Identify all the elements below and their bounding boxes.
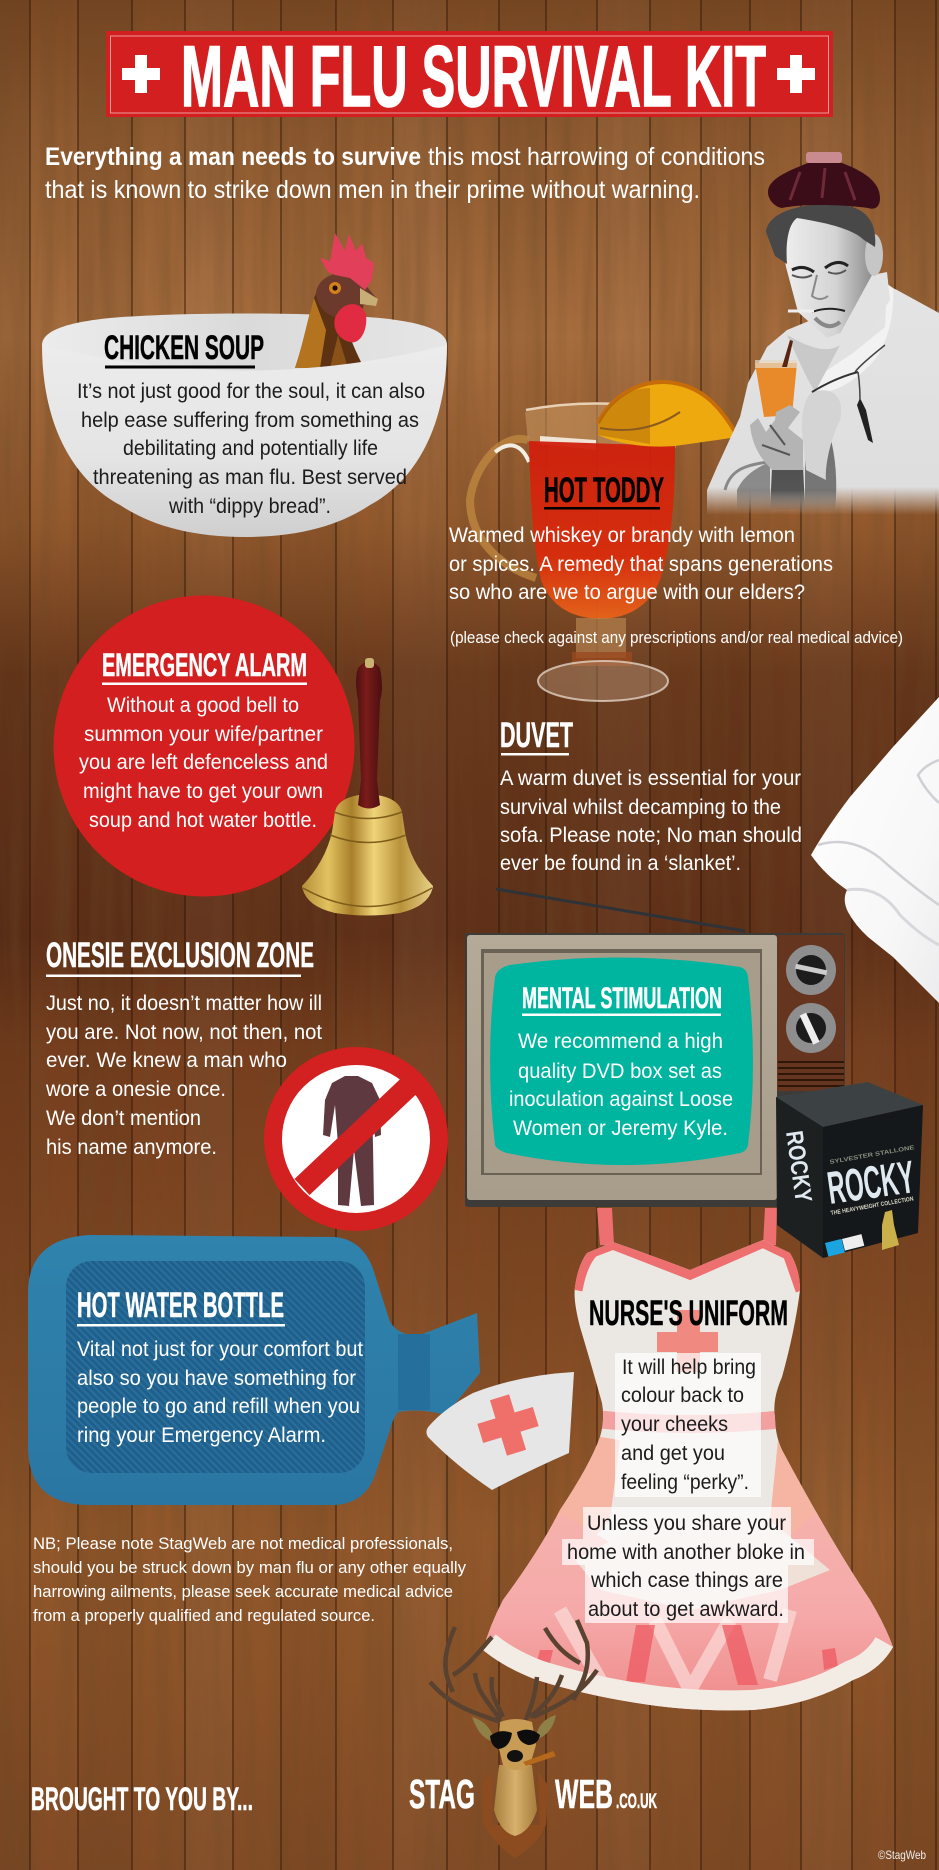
panel: chicken soup [42, 233, 447, 537]
body text: duvet: ever be found in a ‘slanket’. [500, 852, 741, 875]
disclaimer note: from a properly qualified and regulated source. [33, 1606, 375, 1625]
body text: hot water bottle: Vital not just for your comfort but [77, 1338, 363, 1361]
bowl inner [42, 314, 447, 372]
disclaimer note: NB; Please note StagWeb are not medical professionals, [33, 1534, 453, 1553]
ice bag [768, 163, 880, 209]
nose [507, 1750, 523, 1762]
cigarette [788, 310, 814, 312]
disclaimer note: should you be struck down by man flu or any other equally [33, 1558, 466, 1577]
heading: onesie exclusion zone: ONESIE EXCLUSION ZONE [46, 936, 314, 975]
disclaimer note: harrowing ailments, please seek accurate medical advice [33, 1582, 453, 1601]
knob: lower [786, 1003, 836, 1053]
neckline trim [575, 1240, 803, 1290]
body text: onesie: his name anymore. [46, 1136, 217, 1159]
logo text: web.co.uk: WEB [555, 1771, 613, 1817]
icon: DVD box set: ROCKY [780, 1129, 817, 1204]
body text: duvet: sofa. Please note; No man should [500, 824, 802, 847]
glass handle [470, 439, 536, 578]
body text: nurse's uniform upper: feeling “perky”. [621, 1471, 749, 1494]
head [780, 210, 872, 338]
body text: emergency alarm: Without a good bell to [107, 694, 299, 717]
hand [750, 405, 803, 470]
body text: duvet [500, 767, 802, 875]
forearm [770, 465, 805, 510]
straps [597, 1208, 777, 1245]
facial features [792, 262, 848, 272]
body text: onesie: Just no, it doesn’t matter how ill [46, 992, 322, 1015]
icon: left plus [122, 55, 160, 93]
body text: mental stimulation: Women or Jeremy Kyle. [513, 1117, 728, 1140]
title banner [106, 29, 833, 125]
heading: nurse's uniform: NURSE'S UNIFORM [589, 1294, 788, 1333]
blanket shading [737, 462, 770, 512]
body text: hot toddy [449, 524, 833, 604]
drink [529, 441, 675, 619]
icon: nurse hat [426, 1372, 574, 1490]
heading: mental stimulation: MENTAL STIMULATION [522, 982, 722, 1015]
logo text: stag: STAG [409, 1771, 475, 1817]
footer: brought to you by: BROUGHT TO YOU BY... [31, 1781, 253, 1817]
body text: mental stimulation [509, 1030, 733, 1140]
head [498, 1719, 536, 1770]
logo text: web.co.uk: .CO.UK [616, 1790, 657, 1813]
hem [483, 1647, 893, 1710]
icon: hot toddy glass [470, 382, 738, 701]
body text: nurse's uniform upper: It will help bring [622, 1356, 756, 1379]
body text: mental stimulation: inoculation against Loose [509, 1088, 733, 1111]
skirt highlights [560, 1610, 790, 1690]
icon: stag head logo [430, 1620, 597, 1858]
belt [602, 1410, 776, 1433]
teal screen [490, 957, 753, 1165]
body text: mental stimulation: We recommend a high [518, 1030, 723, 1053]
antlers [430, 1620, 597, 1722]
icon: DVD box set [776, 1082, 923, 1258]
icon: duvet [811, 697, 939, 1003]
body text: emergency alarm [79, 694, 328, 832]
bottle silhouette [28, 1235, 480, 1505]
glass rim area [525, 404, 680, 448]
blanket [707, 285, 939, 520]
arm sleeve [802, 390, 841, 480]
body text: duvet: survival whilst decamping to the [500, 796, 781, 819]
icon: hand bell [302, 658, 433, 916]
pleats [535, 1625, 838, 1685]
panel: nurse's uniform text [562, 1294, 814, 1623]
body text: nurse's uniform upper: your cheeks [621, 1413, 728, 1436]
body text: emergency alarm: summon your wife/partner [84, 723, 323, 746]
icon: no onesie sign [273, 1056, 439, 1222]
body text: nurse's uniform lower: home with another bloke in [567, 1541, 805, 1564]
body text: nurse's uniform upper [621, 1356, 756, 1494]
apron [575, 1520, 830, 1610]
body text: duvet: A warm duvet is essential for your [500, 767, 801, 790]
heading: chicken soup: CHICKEN SOUP [104, 329, 264, 367]
body text: emergency alarm: soup and hot water bottle. [89, 809, 317, 832]
body text: onesie: We don’t mention [46, 1107, 201, 1130]
body text: chicken soup: threatening as man flu. Best served [93, 466, 407, 489]
bowl body [42, 345, 447, 537]
side panels [480, 1437, 620, 1660]
scarf [812, 272, 893, 392]
intro text [45, 143, 765, 204]
cross [657, 1310, 718, 1372]
body text: onesie: wore a onesie once. [45, 1078, 226, 1101]
body text: nurse's uniform lower [567, 1512, 805, 1621]
intro text: this most harrowing of conditions [428, 143, 765, 171]
icon: DVD box set: SYLVESTER STALLONE [829, 1145, 915, 1166]
icon: television [465, 889, 845, 1207]
stem and base [576, 618, 626, 658]
bottle ribbed panel [66, 1261, 365, 1473]
body text: mental stimulation: quality DVD box set as [518, 1060, 722, 1083]
tv cabinet [465, 933, 845, 1207]
panel: hot water bottle [28, 1235, 480, 1505]
body text: hot water bottle: ring your Emergency Alarm. [77, 1424, 326, 1447]
body text: hot water bottle [77, 1338, 363, 1447]
knob: upper [786, 945, 836, 995]
body text: nurse's uniform lower: about to get awkward. [588, 1598, 784, 1621]
icon: DVD box set: THE HEAVYWEIGHT COLLECTION [830, 1196, 914, 1217]
copyright: ©StagWeb [878, 1848, 926, 1862]
body text: chicken soup: It’s not just good for the soul, it can also [77, 380, 425, 403]
plaque [482, 1772, 548, 1858]
blanket folds [857, 398, 873, 443]
ears [472, 1715, 556, 1742]
juice glass [755, 363, 797, 417]
sunglasses [490, 1730, 540, 1749]
body text: nurse's uniform upper: and get you [621, 1442, 725, 1465]
body text: chicken soup: help ease suffering from something as [81, 409, 419, 432]
body text: hot toddy: Warmed whiskey or brandy with lemon [449, 524, 795, 547]
orange slice [598, 382, 738, 447]
skirt [484, 1512, 893, 1710]
hair [766, 204, 875, 264]
disclaimer note [33, 1534, 466, 1625]
icon: sick man [707, 152, 939, 520]
body text: chicken soup: debilitating and potentially life [123, 437, 378, 460]
panel: duvet text [500, 716, 802, 875]
heading: hot toddy: HOT TODDY [544, 471, 664, 510]
panel: emergency alarm [54, 596, 354, 896]
intro text: that is known to strike down men in their prime without warning. [45, 176, 700, 204]
body text: hot water bottle: also so you have something for [77, 1367, 356, 1390]
heading: duvet: DUVET [500, 716, 573, 755]
text backing [562, 1353, 814, 1623]
body text: chicken soup: with “dippy bread”. [168, 495, 331, 518]
antenna [496, 889, 745, 931]
body text: onesie [45, 992, 322, 1159]
body text: nurse's uniform lower: Unless you share your [587, 1512, 786, 1535]
neck [494, 1765, 537, 1836]
panel: onesie exclusion zone [45, 936, 439, 1222]
wood side panel [777, 935, 844, 1091]
body text: hot toddy: so who are we to argue with our elders? [449, 581, 805, 604]
cigar [523, 1751, 556, 1766]
heading: hot toddy [544, 471, 664, 510]
intro text: Everything a man needs to survive [45, 143, 421, 171]
body text: hot toddy: or spices. A remedy that spans generations [449, 553, 833, 576]
body text: nurse's uniform upper: colour back to [621, 1384, 744, 1407]
bottle collar [398, 1334, 430, 1410]
body text: hot water bottle: people to go and refill when you [77, 1395, 360, 1418]
body text: onesie: you are. Not now, not then, not [46, 1021, 322, 1044]
body text: emergency alarm: might have to get your own [83, 780, 323, 803]
body text: nurse's uniform lower: which case things are [590, 1569, 783, 1592]
icon: chicken [295, 233, 378, 368]
body text: chicken soup [77, 380, 425, 518]
body text: onesie: ever. We knew a man who [46, 1049, 287, 1072]
speaker vent [778, 1062, 844, 1086]
body text: emergency alarm: you are left defenceless and [79, 751, 328, 774]
heading: emergency alarm: EMERGENCY ALARM [102, 647, 307, 683]
heading: hot water bottle: HOT WATER BOTTLE [77, 1286, 284, 1325]
icon: right plus [777, 55, 815, 93]
icon: nurse's uniform dress [470, 1208, 910, 1725]
